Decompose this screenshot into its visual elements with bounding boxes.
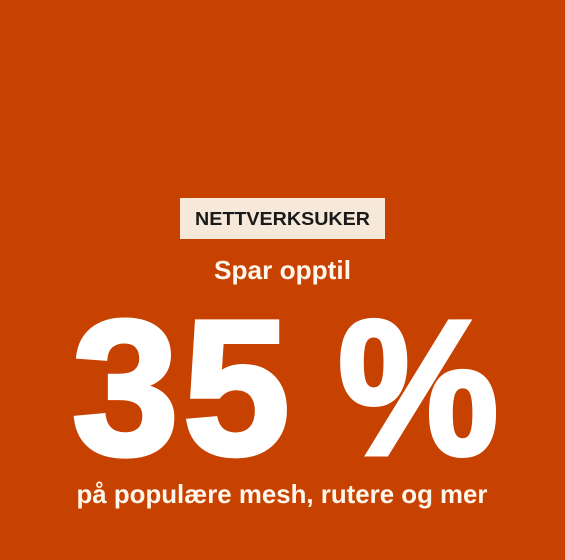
big number: 35 %: 5 [183, 280, 290, 495]
big number: 35 %: % [338, 281, 498, 495]
subheading: Spar opptil: Spar opptil [214, 255, 351, 285]
badge: NETTVERKSUKER: NETTVERKSUKER [195, 209, 370, 229]
caption: på populære mesh, rutere og mer: på populære mesh, rutere og mer [76, 479, 488, 509]
big number: 35 % [72, 280, 498, 495]
badge: NETTVERKSUKER [180, 198, 385, 239]
big number: 35 %: 3 [72, 280, 179, 495]
